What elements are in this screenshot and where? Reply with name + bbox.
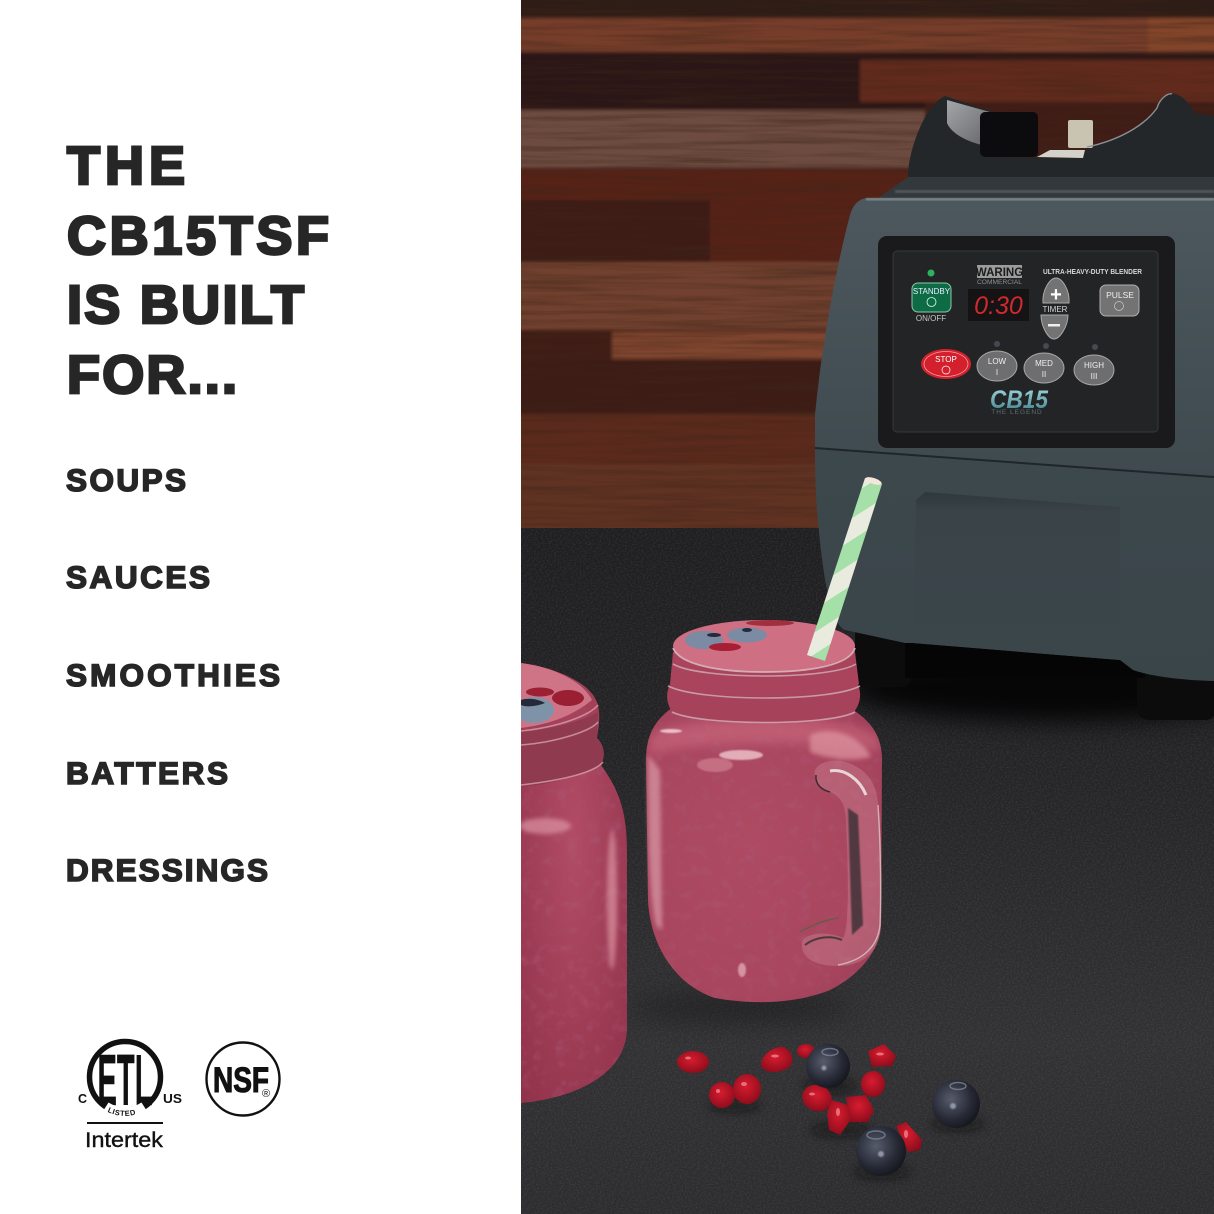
heading: FOR... — [67, 345, 237, 405]
med button: MED — [1035, 359, 1053, 368]
low button: LOW — [988, 357, 1007, 366]
ETL Intertek certification logo: US — [163, 1092, 182, 1106]
low button: I — [996, 368, 998, 377]
blueberries — [806, 1044, 980, 1176]
white text panel — [0, 0, 521, 1214]
left jar of smoothie — [514, 663, 627, 1103]
model line: ULTRA-HEAVY-DUTY BLENDER — [1043, 267, 1143, 276]
med button: II — [1042, 370, 1046, 379]
med button — [1024, 353, 1064, 383]
toppings — [685, 620, 794, 651]
NSF certification logo: NSF — [213, 1061, 269, 1100]
low button — [977, 351, 1017, 381]
glass mug of smoothie — [646, 476, 883, 1004]
mug shoulder glow — [650, 718, 880, 755]
stop button — [921, 349, 971, 379]
timer plus button — [1043, 278, 1069, 306]
blueberry glints — [822, 1066, 956, 1157]
blender body — [815, 198, 1214, 477]
mug neck upper — [670, 652, 859, 696]
base recess — [913, 492, 1120, 660]
timer minus button — [1041, 315, 1068, 339]
control panel — [878, 236, 1175, 448]
ETL Intertek certification logo — [78, 1038, 182, 1152]
list of uses: BATTERS — [66, 755, 228, 791]
standby LED — [928, 270, 934, 276]
scattered berries — [677, 1044, 984, 1178]
list of uses: SAUCES — [66, 559, 210, 595]
ETL Intertek certification logo: Intertek — [85, 1128, 163, 1152]
drive plate — [1037, 150, 1085, 158]
jar pad collar — [878, 177, 1214, 198]
ETL Intertek certification logo: LISTED — [108, 1107, 135, 1116]
blender feet — [855, 625, 1214, 720]
list of uses: SMOOTHIES — [66, 657, 280, 693]
mug texture — [646, 708, 882, 1004]
product photo — [510, 0, 1214, 1214]
body top edge highlight — [866, 198, 1214, 200]
mug shoulder sheen — [810, 731, 871, 759]
right lid edge line — [1087, 94, 1172, 147]
stop button: STOP — [935, 355, 957, 364]
heading: CB15TSF — [67, 206, 329, 266]
high button — [1074, 355, 1114, 385]
timer label: TIMER — [1043, 305, 1068, 314]
wood wall — [510, 0, 1214, 534]
pomegranate seeds — [677, 1044, 922, 1152]
list of uses: SOUPS — [66, 462, 186, 498]
speed LEDs — [994, 341, 1098, 350]
mug neck lower — [667, 684, 860, 722]
smoothie surface — [673, 620, 855, 672]
high button: HIGH — [1084, 361, 1104, 370]
blender — [815, 94, 1214, 720]
ETL Intertek certification logo: ETL — [98, 1041, 152, 1121]
NSF certification logo — [206, 1042, 280, 1116]
Waring logo: WARING — [976, 267, 1023, 279]
mug neck threads — [668, 664, 860, 722]
left jar highlights — [519, 818, 617, 970]
high button: III — [1091, 372, 1097, 381]
left jar toppings — [514, 688, 584, 723]
left jar surface — [521, 663, 592, 728]
Waring logo — [976, 265, 1022, 284]
pomegranate glints — [685, 1052, 908, 1138]
collar highlight — [895, 190, 1214, 193]
dark floor — [521, 528, 1214, 1214]
blender base — [815, 448, 1214, 681]
CB15 logo: CB15 — [990, 386, 1049, 414]
timer display: 0:30 — [974, 292, 1023, 320]
CB15 logo: THE LEGEND — [991, 409, 1043, 416]
body seam — [815, 448, 1214, 477]
ETL Intertek certification logo: C — [78, 1092, 87, 1106]
list of uses: DRESSINGS — [66, 852, 268, 888]
NSF certification logo: ® — [262, 1088, 270, 1100]
black lid pad — [908, 94, 1214, 177]
standby button: STANDBY — [913, 287, 951, 296]
blueberry crowns — [822, 1048, 966, 1139]
mug smoothie body — [646, 708, 882, 1002]
grey face of lid — [947, 100, 990, 144]
rim highlight — [673, 648, 855, 672]
heading: THE — [67, 136, 185, 196]
on/off label: ON/OFF — [916, 314, 946, 323]
Waring logo: COMMERCIAL — [977, 279, 1022, 286]
left jar neck shading — [521, 712, 604, 787]
standby button — [912, 283, 951, 312]
timer display — [968, 289, 1029, 321]
left jar rim — [521, 705, 603, 785]
tan drive nub — [1068, 120, 1093, 148]
berry shadows — [709, 1079, 984, 1178]
heading — [67, 136, 329, 405]
paper straw — [807, 478, 882, 661]
timer plus button: + — [1050, 284, 1062, 306]
black coupling block — [980, 112, 1038, 157]
pulse button — [1100, 285, 1139, 316]
mug highlights — [660, 729, 763, 977]
straw opening — [864, 476, 883, 486]
mug left edge sheen — [648, 755, 662, 930]
list of uses — [66, 462, 280, 888]
heading: IS BUILT — [67, 275, 304, 335]
pulse button: PULSE — [1106, 290, 1134, 300]
mug handle — [800, 761, 882, 966]
